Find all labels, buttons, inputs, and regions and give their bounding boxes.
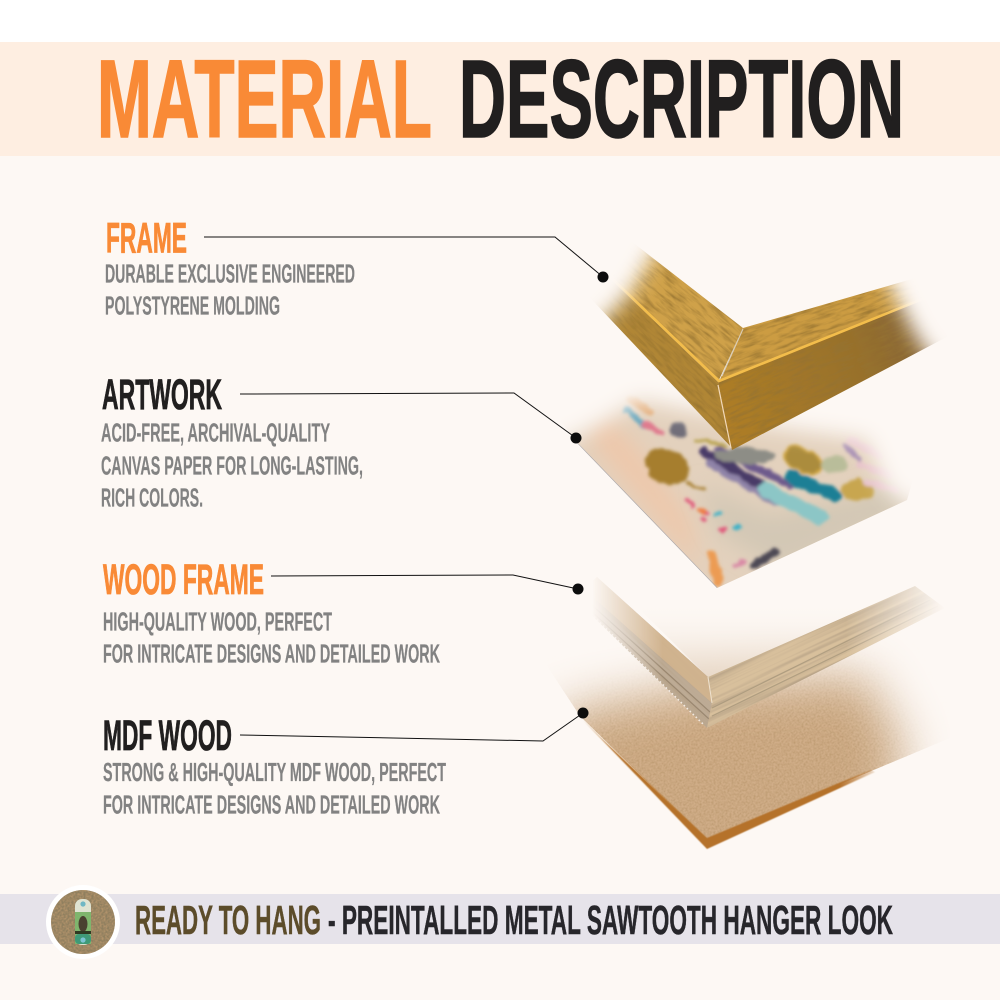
text block: artwork: CANVAS PAPER FOR LONG-LASTING, — [101, 450, 363, 480]
text block: artwork: ACID-FREE, ARCHIVAL-QUALITY — [101, 418, 330, 448]
text block: artwork — [101, 371, 363, 512]
text block: frame: FRAME — [106, 214, 187, 262]
callout: frame — [204, 237, 608, 282]
title text: MATERIAL — [97, 38, 432, 161]
footer banner — [0, 894, 1000, 944]
callout: MDF wood — [240, 708, 588, 741]
text block: MDF wood: FOR INTRICATE DESIGNS AND DETAILED WORK — [103, 790, 440, 820]
icon: sawtooth hanger — [46, 885, 120, 959]
text block: MDF wood: STRONG & HIGH-QUALITY MDF WOOD, PERFECT — [103, 757, 446, 787]
footer text — [135, 897, 893, 943]
text block: wood frame: HIGH-QUALITY WOOD, PERFECT — [103, 606, 332, 636]
illustration: artwork canvas layer — [567, 392, 909, 588]
illustration: wood frame layer — [596, 578, 938, 728]
text block: wood frame: WOOD FRAME — [103, 556, 264, 604]
text block: MDF wood — [103, 712, 446, 820]
text block: MDF wood: MDF WOOD — [103, 712, 232, 760]
text block: frame — [105, 214, 355, 320]
footer text: READY TO HANG — [135, 897, 321, 943]
title text — [97, 38, 904, 161]
callout: wood frame — [271, 575, 584, 594]
callout: artwork — [240, 393, 582, 444]
illustration: gold polystyrene frame — [596, 248, 939, 450]
text block: artwork: RICH COLORS. — [101, 482, 203, 512]
top white strip — [0, 0, 1000, 42]
text block: wood frame: FOR INTRICATE DESIGNS AND DETAILED WORK — [103, 638, 440, 668]
text block: frame: POLYSTYRENE MOLDING — [105, 290, 280, 320]
text block: artwork: ARTWORK — [102, 371, 222, 419]
title banner — [0, 38, 1000, 161]
text block: frame: DURABLE EXCLUSIVE ENGINEERED — [105, 258, 355, 288]
text block: wood frame — [103, 556, 440, 668]
illustration: MDF wood layer — [558, 648, 933, 850]
